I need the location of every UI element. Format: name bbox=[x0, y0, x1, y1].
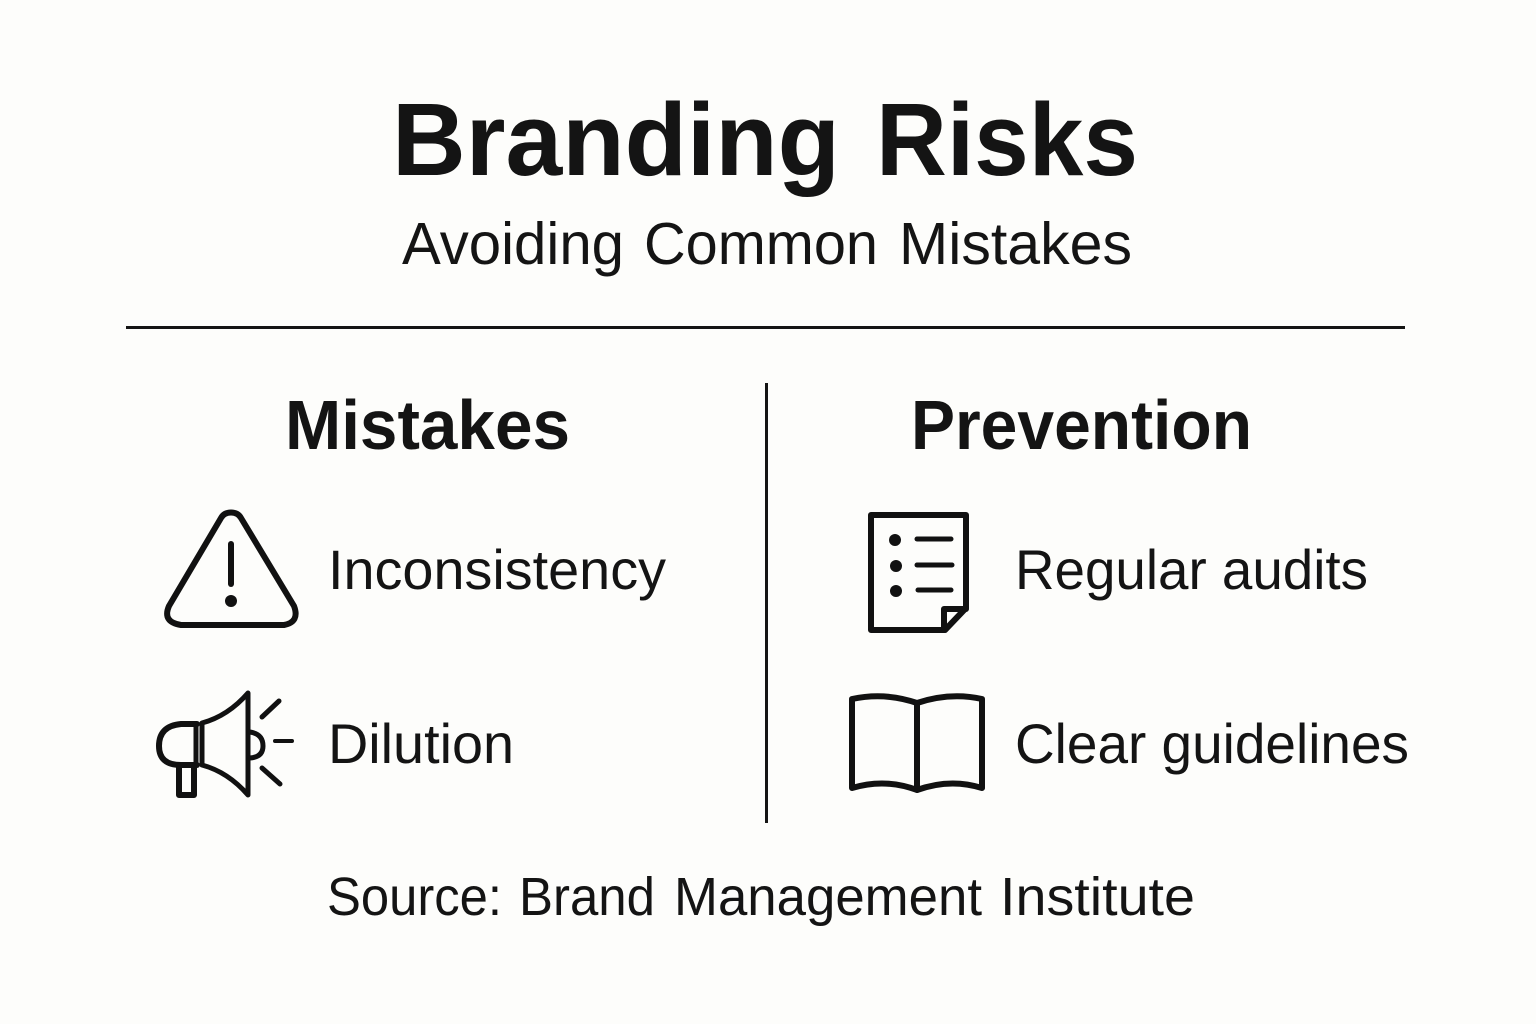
heading: prevention: Prevention bbox=[911, 386, 1252, 464]
source note: Management bbox=[674, 867, 982, 927]
panel: mistakes bbox=[159, 386, 666, 795]
label: inconsistency: Inconsistency bbox=[328, 538, 666, 601]
panel: prevention bbox=[852, 386, 1409, 790]
icon: megaphone bbox=[159, 693, 292, 795]
source note: Institute bbox=[1000, 867, 1195, 927]
source note: Source: bbox=[327, 867, 502, 927]
icon: warning triangle bbox=[167, 512, 296, 625]
icon: open book bbox=[852, 696, 982, 790]
subtitle: Mistakes bbox=[899, 211, 1132, 277]
subtitle: Avoiding bbox=[402, 211, 624, 277]
label: clear guidelines: Clear guidelines bbox=[1015, 712, 1409, 775]
label: dilution: Dilution bbox=[328, 712, 514, 775]
label: regular audits: Regular audits bbox=[1015, 538, 1368, 601]
title: Branding bbox=[392, 82, 840, 197]
icon: checklist document bbox=[871, 515, 966, 630]
source note: Brand bbox=[519, 867, 655, 927]
title: Risks bbox=[876, 82, 1138, 197]
heading: mistakes: Mistakes bbox=[285, 386, 570, 464]
subtitle: Common bbox=[644, 211, 878, 277]
